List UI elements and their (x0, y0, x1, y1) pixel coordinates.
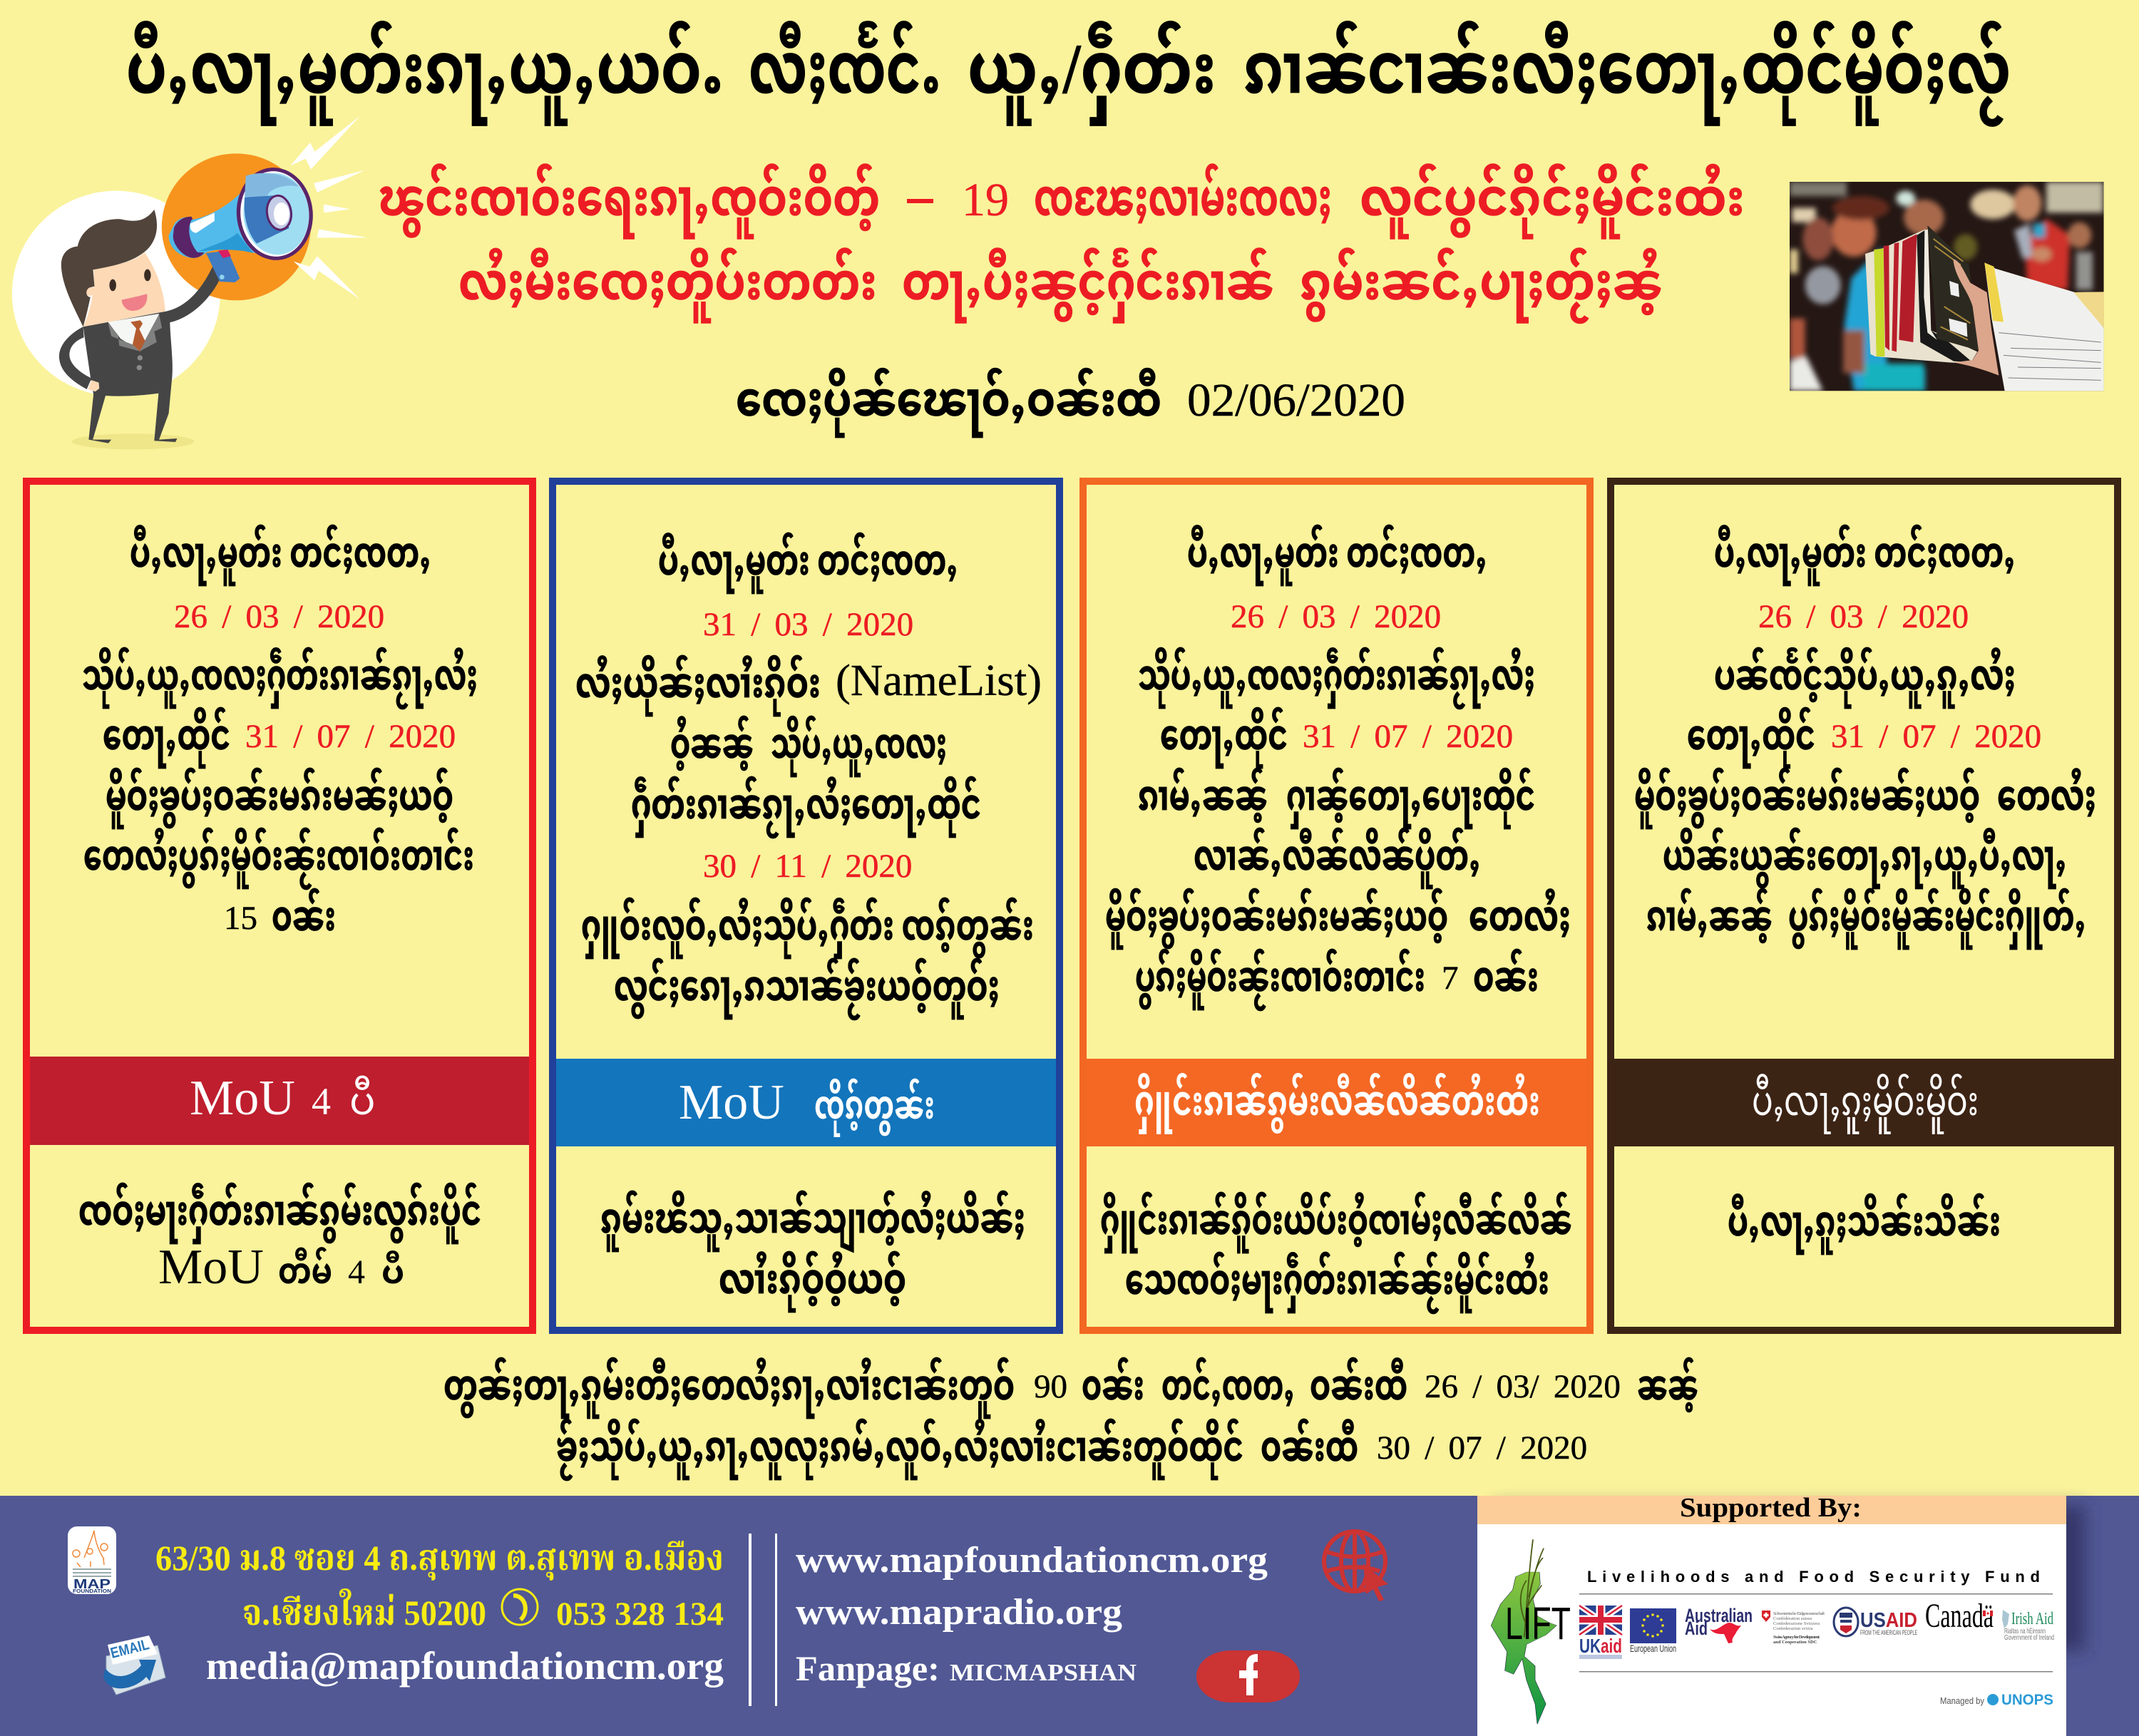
card 4 heading: ပီႇလႃႇမူတ်း တင်ႈၸတႇ (1714, 525, 2016, 586)
red headline (379, 163, 1745, 324)
card 2 line: (NameList) (836, 657, 1042, 705)
LIFT logo: LIFT (1505, 1598, 1571, 1649)
card 4 line: တေလႆႈ (1997, 769, 2096, 819)
card 2 line: ဝႆ့ၼၼ့် (670, 717, 754, 771)
card 2 band label: ၸိုၵ့်တွၼ်း (814, 1078, 935, 1137)
card 2 line: ႁူဝ်းလူဝ်ႇလႆႈသိုပ်ႇႁဵတ်း ၸၵ့်တွၼ်း (581, 898, 1034, 959)
icon: MAP Foundation logo: MAP (73, 1577, 111, 1591)
closing note line 1 (443, 1358, 1698, 1419)
card 1 line: 15 (224, 900, 257, 937)
footer band (0, 1496, 2139, 1736)
logo: Swiss agency: Schweizerische Eidgenossenschaft (1773, 1611, 1825, 1616)
logo: European Union: European Union (1630, 1643, 1676, 1654)
website 1: www.mapfoundationcm.org (796, 1540, 1268, 1581)
card 3 until date: တေႃႇထိုင် (1160, 708, 1288, 769)
panel: card 4 brown (1611, 481, 2118, 1330)
closing note line 1: ဝၼ်း (1082, 1358, 1144, 1409)
fanpage: MICMAPSHAN (950, 1660, 1137, 1686)
card 1 start date: 26 / 03 / 2020 (174, 598, 384, 635)
Thai address line 2 and phone: 053 328 134 (556, 1596, 724, 1633)
card 1 note line 2 (158, 1240, 404, 1295)
fanpage: Fanpage: (796, 1648, 940, 1688)
card 2 line (575, 656, 1042, 717)
card 1 until date: တေႃႇထိုင် (103, 708, 230, 769)
logo: USAID: USAID (1860, 1609, 1917, 1632)
card 3 line: ပွၵ်ႈမိူဝ်းၼႂ်းၸၢဝ်းတၢင်း (1135, 950, 1425, 1010)
card 2 band label (679, 1075, 935, 1137)
closing note line 1: တွၼ်ႈတႃႇၵူမ်းတီႈတေလႆႈၵႃႇလၢႆးငၢၼ်းတူဝ် (443, 1358, 1015, 1419)
card 2 line (670, 717, 947, 777)
logo: Swiss agency: Confederaziun svizra (1773, 1626, 1813, 1631)
title (126, 20, 2011, 127)
card 3 line: ဝၼ်း (1473, 950, 1539, 1000)
issue date: ၸေႈပိုၼ်ၽေႃဝ်ႇဝၼ်းထီ (736, 367, 1161, 438)
illustration: man with megaphone (12, 116, 367, 449)
card 1 line (224, 889, 336, 940)
card 4 band label: ပီႇလႃႇၵူႈမိူဝ်းမိူဝ်း (1752, 1073, 1979, 1134)
card 4 note: ပီႇလႃႇၵူႈသိၼ်းသိၼ်း (1728, 1194, 2001, 1255)
supported by heading: Supported By: (1680, 1493, 1862, 1523)
icon: MAP Foundation logo: FOUNDATION (73, 1589, 111, 1594)
card 3 until date (1160, 708, 1513, 769)
Thai address line 2 and phone: จ.เชียงใหม่ 50200 (242, 1588, 486, 1633)
card 2 band label: MoU (679, 1075, 784, 1130)
card 1 note line 2: ပီ (381, 1250, 404, 1290)
title: လီႈၸႅင်ႉ (749, 20, 941, 108)
card 1 line: မိူဝ်ႈၶွပ်ႈဝၼ်းမၵ်းမၼ်ႈယဝ့် (106, 769, 453, 829)
issue date: 02/06/2020 (1187, 374, 1405, 426)
card 4 until date: 31 / 07 / 2020 (1831, 718, 2041, 755)
headline line 1: 19 (962, 174, 1009, 226)
card 1 line: ဝၼ်း (272, 889, 336, 940)
icon: email envelope: EMAIL (109, 1636, 151, 1662)
website 2: www.mapradio.org (796, 1592, 1122, 1633)
closing note line 1: 26 / 03/ 2020 (1425, 1368, 1621, 1405)
panel: card 1 red (26, 481, 533, 1330)
logo: Canada (1925, 1597, 1994, 1635)
headline line 1: လူင်ပွင်ၵိုင်ႈမိူင်းထႆး (1360, 163, 1745, 240)
card 1 band label: ပီ (349, 1075, 376, 1123)
logo: Australian Aid: Australian (1685, 1605, 1753, 1626)
icon: email envelope (103, 1635, 165, 1695)
card 3 note line 1: ႁိူင်းၵၢၼ်ၵိူဝ်းယိပ်းဝႆ့ၸၢမ်ႈလီၼ်လိၼ် (1100, 1193, 1572, 1253)
card 3 line: သိုပ်ႇယူႇၸလႈႁဵတ်းၵၢၼ်ၵႂႃႇလႆႈ (1138, 648, 1535, 709)
card 3 until date: 31 / 07 / 2020 (1303, 718, 1513, 755)
logo: Australian Aid (1685, 1605, 1753, 1643)
icon: facebook button (1196, 1650, 1300, 1702)
Thai address line 1: 63/30 ม.8 ซอย 4 ถ.สุเทพ ต.สุเทพ อ.เมือง (155, 1538, 724, 1580)
logo: Swiss agency: and Cooperation SDC (1773, 1640, 1817, 1645)
card 1 heading: ပီႇလႃႇမူတ်း တင်ႈၸတႇ (130, 525, 431, 586)
card 2 line: ႁဵတ်းၵၢၼ်ၵႂႃႇလႆႈတေႃႇထိုင် (631, 777, 981, 838)
fanpage (796, 1648, 1137, 1688)
card 1 until date: 31 / 07 / 2020 (245, 718, 456, 755)
headline line 1: ၽွင်းၸၢဝ်းရေးၵႃႇၸူဝ်းဝိတ့် (379, 163, 880, 240)
headline line 1: ၸၽႄႈလၢမ်းၸလႈ (1034, 163, 1332, 227)
logo: Irish Aid: Rialtas na hÉireann (2004, 1626, 2046, 1635)
title: ယူႇ/ႁဵတ်း (968, 20, 1216, 126)
closing note line 2: ဝၼ်းထီ (1261, 1419, 1358, 1470)
photo: passports held in hand (1790, 182, 2104, 391)
card 1 band (30, 1057, 529, 1145)
logo: UK aid (1579, 1606, 1622, 1659)
headline line 1 (379, 163, 1745, 240)
headline line 2: လႆႈမီးၸေႈတိူပ်းတတ်း (458, 247, 877, 324)
closing note line 2 (556, 1419, 1587, 1480)
logo: Irish Aid: Irish Aid (2011, 1610, 2053, 1628)
man (83, 312, 177, 443)
card 2 line: လွင်ႈၵေႃႇၵသၢၼ်ၶႂ်းယဝ့်တူဝ်ႈ (614, 959, 1000, 1019)
logo: Canada: Canadä (1925, 1597, 1994, 1635)
card 3 note line 2: သေၸဝ်ႈမႃးႁဵတ်းၵၢၼ်ၼႂ်းမိူင်းထႆး (1125, 1253, 1549, 1313)
headline line 2 (458, 247, 1663, 324)
LIFT logo (1491, 1539, 1571, 1724)
card 1 until date (103, 708, 456, 769)
card 2 band (556, 1059, 1056, 1146)
card 3 line: လၢၼ်ႇလီၼ်လိၼ်ပိူတ်ႇ (1194, 828, 1481, 889)
logo: Swiss agency (1762, 1611, 1825, 1645)
card 3 line: 7 (1442, 960, 1459, 997)
logo: UK aid: UKaid (1579, 1635, 1622, 1657)
panel: supporters (1477, 1493, 2085, 1736)
Thai address line 2 and phone (242, 1588, 724, 1633)
card 3 line: ၵၢမ်ႇၼၼ့် (1138, 769, 1268, 823)
card 4 until date (1687, 708, 2041, 769)
megaphone (206, 251, 240, 282)
card 4 start date: 26 / 03 / 2020 (1758, 598, 1969, 635)
closing note line 2: 30 / 07 / 2020 (1377, 1429, 1587, 1467)
headline line 2: တႃႇပီႈၼွင့်ႁႅင်းၵၢၼ် (902, 247, 1274, 324)
passport stack (1865, 230, 1977, 364)
card 4 band (1614, 1059, 2114, 1146)
logo: Australian Aid: Aid (1685, 1618, 1708, 1639)
card 3 line: တေလႆႈ (1469, 889, 1571, 940)
dividers (749, 1534, 752, 1706)
closing note line 1: ၼၼ့် (1637, 1358, 1698, 1412)
card 4 line: မိူဝ်ႈၶွပ်ႈဝၼ်းမၵ်းမၼ်ႈယဝ့် (1634, 769, 1980, 829)
websites (796, 1540, 1268, 1688)
icon: MAP Foundation logo (68, 1526, 116, 1594)
closing note line 1: 90 (1034, 1368, 1067, 1405)
logo: Irish Aid: Government of Ireland (2004, 1634, 2054, 1642)
card 3 line: မိူဝ်ႈၶွပ်ႈဝၼ်းမၵ်းမၼ်ႈယဝ့် (1105, 889, 1448, 950)
icon: globe with cursor (1324, 1531, 1388, 1601)
logo: USAID: FROM THE AMERICAN PEOPLE (1860, 1629, 1917, 1636)
card 2 note line 1: ၵူမ်းၽိသူႇသၢၼ်သျၢတ့်လႆႈယိၼ်ႈ (600, 1191, 1025, 1253)
logo: Irish Aid (2002, 1610, 2054, 1642)
closing note line 1: ဝၼ်းထီ (1310, 1358, 1407, 1409)
logo: Swiss agency: Swiss Agency for Development (1773, 1635, 1820, 1640)
fund name: Livelihoods and Food Security Fund (1587, 1568, 2040, 1586)
card 2 heading: ပီႇလႃႇမူတ်း တင်ႈၸတႇ (658, 533, 958, 594)
card 1 note line 1: ၸဝ်ႈမႃးႁဵတ်းၵၢၼ်ၵွမ်းလွၵ်းပိူင် (78, 1183, 481, 1244)
card 3 start date: 26 / 03 / 2020 (1231, 598, 1441, 635)
card 2 start date: 31 / 03 / 2020 (703, 606, 913, 643)
panel: card 2 blue (553, 481, 1060, 1330)
managed by UNOPS: Managed by (1940, 1695, 1984, 1706)
logo: Swiss agency: Confederazione Svizzera (1773, 1621, 1820, 1626)
title: ပီႇလႃႇမူတ်းၵႃႇယူႇယဝ်ႉ (126, 20, 724, 126)
card 1 note line 2: MoU (158, 1240, 264, 1295)
card 2 end date: 30 / 11 / 2020 (703, 848, 912, 885)
card 1 line: သိုပ်ႇယူႇၸလႈႁဵတ်းၵၢၼ်ၵႂႃႇလႆႈ (82, 648, 478, 709)
card 3 line (1138, 769, 1535, 829)
headline line 2: ၵွမ်းၼင်ႇပႃႈတႂ်ႈၼႆ့ (1300, 247, 1663, 324)
logo: Swiss agency: Confédération suisse (1773, 1616, 1812, 1621)
card 1 band label: MoU (190, 1071, 295, 1126)
card 4 line: ပၼ်ၸႅင့်သိုပ်ႇယူႇၵူႇလႆႈ (1714, 648, 2016, 709)
logo: USAID (1834, 1608, 1917, 1636)
closing note line 2: ၶႂ်ႈသိုပ်ႇယူႇၵႃႇလူလုႈၵမ်ႇလူဝ်ႇလႆႈလၢႆးငၢၼ်းတူဝ်ထိုင် (556, 1419, 1243, 1480)
card 4 line (1646, 889, 2086, 950)
sparks (290, 116, 367, 299)
email address: media@mapfoundationcm.org (206, 1644, 724, 1688)
managed by UNOPS: UNOPS (2001, 1692, 2053, 1708)
card 4 until date: တေႃႇထိုင် (1687, 708, 1815, 769)
card 1 line: တေလႆႈပွၵ်ႈမိူဝ်းၼႂ်းၸၢဝ်းတၢင်း (83, 828, 474, 889)
document (1984, 262, 2104, 391)
issue date (736, 367, 1405, 438)
panel: card 3 orange (1083, 481, 1590, 1330)
hand (1953, 259, 1999, 376)
card 3 heading: ပီႇလႃႇမူတ်း တင်ႈၸတႇ (1187, 525, 1487, 586)
closing note line 1: တင်ႇၸတႇ (1161, 1358, 1295, 1409)
card 1 band label: 4 (312, 1080, 331, 1123)
card 2 line: သိုပ်ႇယူႇၸလႈ (771, 717, 947, 777)
card 3 band label: ႁိူင်းၵၢၼ်ၵွမ်းလီၼ်လိၼ်တႆးထႆး (1134, 1074, 1540, 1134)
card 2 note line 2: လၢႆးၵိုဝ့်ဝႆ့ယဝ့် (719, 1252, 906, 1313)
managed by UNOPS (1940, 1692, 2053, 1708)
logo: European Union (1630, 1608, 1676, 1654)
card 2 line: လႆႈယိုၼ်ႈလၢႆးၵိုဝ်း (575, 656, 821, 717)
card 4 line: ၵၢမ်ႇၼၼ့် (1646, 889, 1773, 943)
card 1 note line 2: 4 (348, 1253, 365, 1291)
card 3 band (1087, 1059, 1586, 1146)
card 3 line: ႁၢၼ့်တေႃႇပေႃးထိုင် (1286, 769, 1535, 829)
card 1 note line 2: တီမ် (278, 1247, 332, 1291)
